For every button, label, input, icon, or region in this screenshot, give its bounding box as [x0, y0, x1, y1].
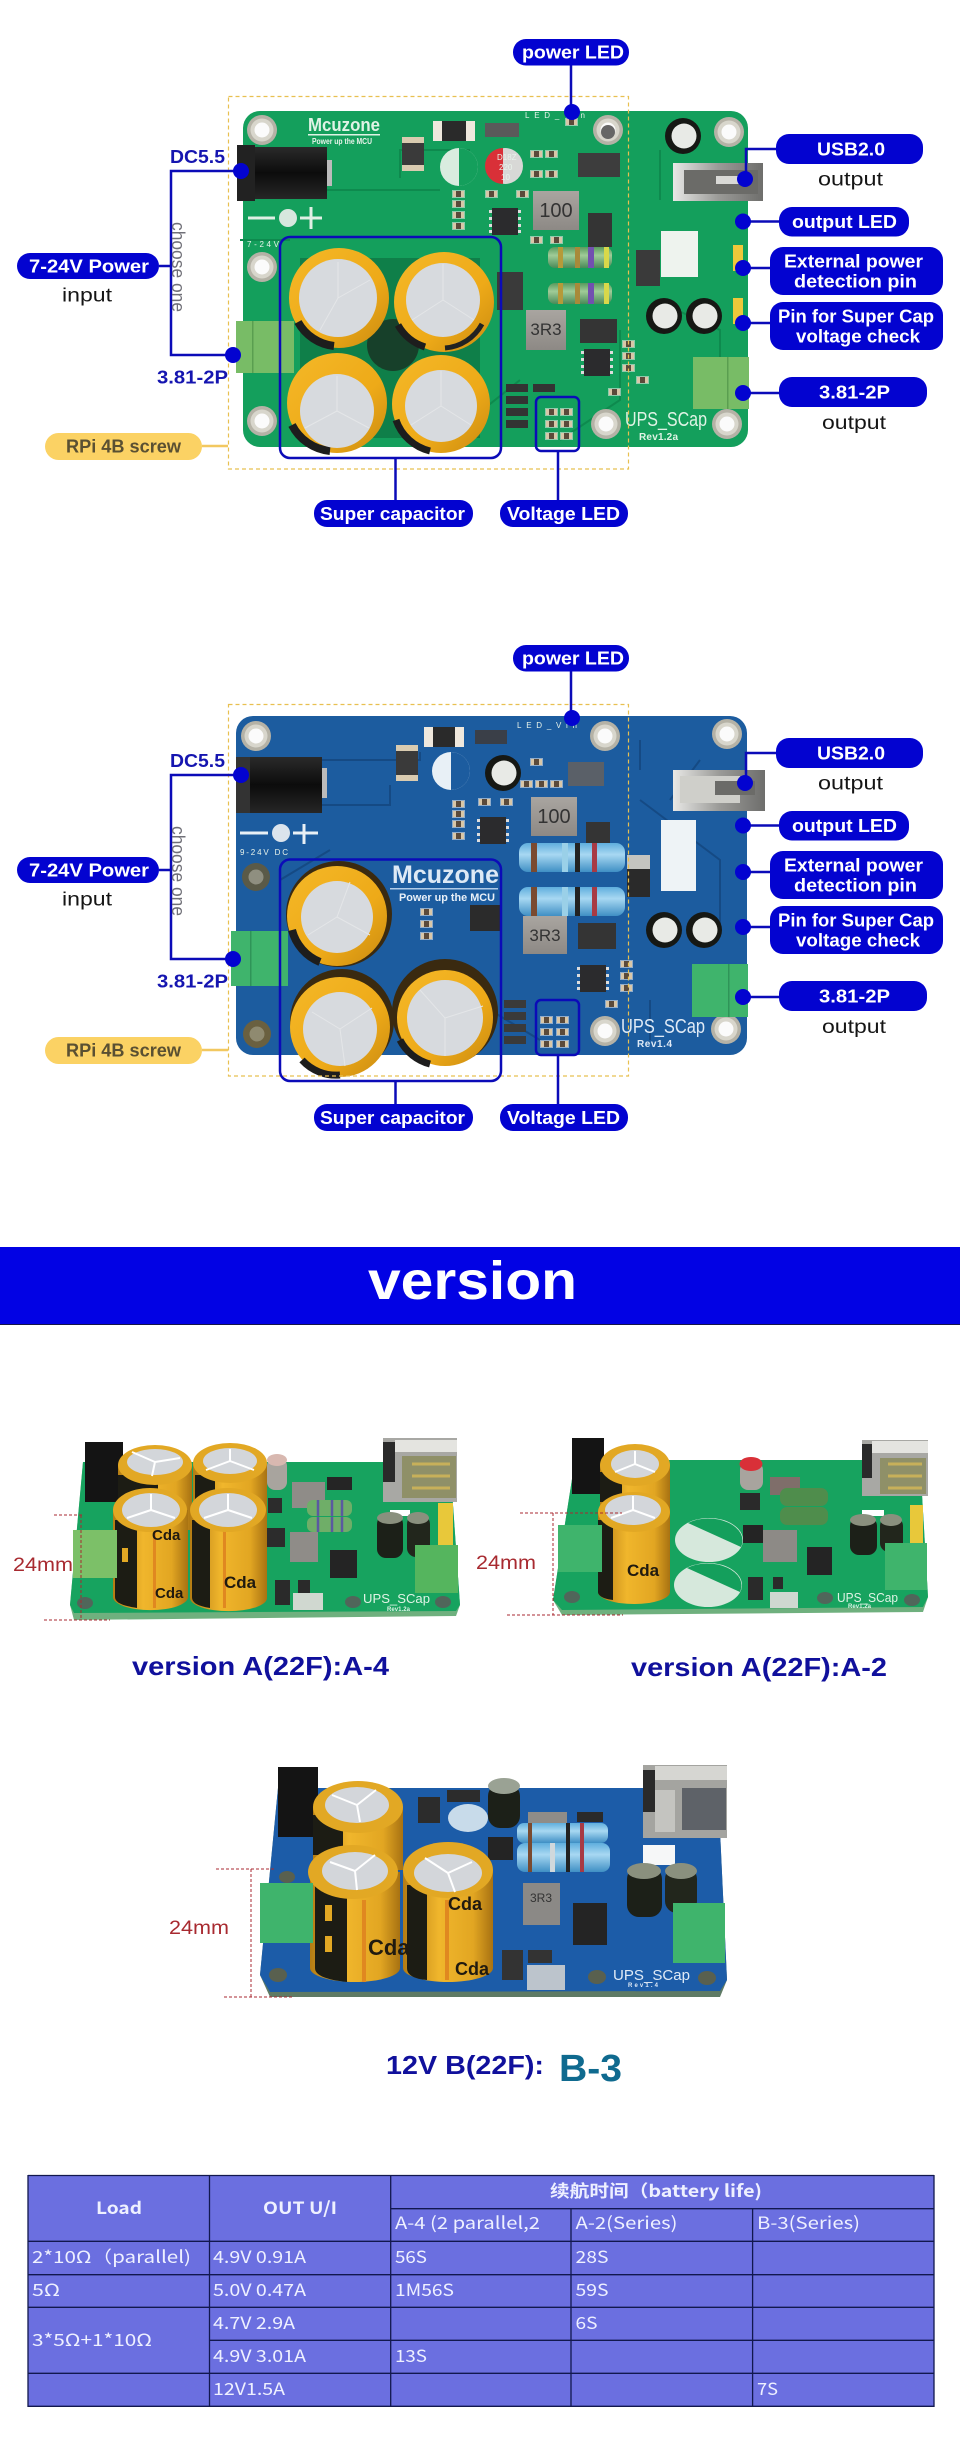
label: pin for super cap voltage check — [770, 906, 943, 954]
connector: output terminal — [693, 357, 749, 409]
PCB: blue B board: Rev1.4 — [637, 1039, 672, 1050]
label: choose one: choose one — [168, 222, 188, 312]
PCB: green A board: 7-24V — [247, 240, 280, 249]
capacitors: B-3 three: Cda — [368, 1935, 410, 1960]
label: pin for super cap voltage check: voltage check — [796, 326, 921, 346]
label: 3.81-2P input: 3.81-2P — [157, 368, 228, 388]
table header: OUT U/I — [263, 2194, 337, 2219]
label: DC5.5: DC5.5 — [170, 147, 225, 167]
table rows: 28S — [576, 2243, 608, 2268]
label: USB2.0 output — [776, 738, 923, 794]
resistors: blue — [519, 843, 625, 916]
label: output LED — [779, 811, 909, 840]
leader line: RPi — [202, 445, 228, 447]
heading banner: version: version — [368, 1251, 577, 1311]
table header: A-4 (2 parallel,2 — [395, 2209, 540, 2234]
table header — [96, 2177, 860, 2234]
table rows: 5Ω — [32, 2276, 60, 2301]
frame: RPi 4B outline — [228, 96, 628, 469]
capacitors: A-2 pair: Cda — [627, 1561, 660, 1580]
PCB: green A board: Power up the MCU — [312, 137, 372, 146]
inductor: 100: 100 — [537, 806, 571, 828]
label: 7-24V Power input: 7-24V Power — [29, 860, 149, 880]
label: DC5.5: DC5.5 — [170, 751, 225, 771]
capacitors: front pair: Cda — [152, 1527, 181, 1544]
table rows: 13S — [395, 2342, 427, 2367]
table rows: 4.7V 2.9A — [213, 2309, 296, 2334]
connector: DC jack — [237, 145, 332, 201]
table rows: 3*5Ω+1*10Ω — [32, 2326, 152, 2351]
logo: Mcuzone: Power up the MCU — [399, 892, 495, 904]
table rows: 5.0V 0.47A — [213, 2276, 307, 2301]
dimension: A-2 24mm — [476, 1513, 623, 1615]
heading banner: version — [0, 1247, 960, 1325]
label: 7-24V Power input: input — [62, 890, 113, 910]
connector: DC jack — [236, 757, 327, 813]
label: external power detection pin: detection pin — [794, 272, 917, 292]
label: super capacitor — [314, 500, 473, 527]
label: 3.81-2P output: output — [822, 413, 887, 434]
table rows: 4.9V 0.91A — [213, 2243, 307, 2268]
label: 3.81-2P input: 3.81-2P — [157, 972, 228, 992]
label: power LED — [513, 39, 629, 66]
highlight: voltage LED box — [536, 1000, 579, 1055]
label: power LED: power LED — [522, 648, 624, 668]
leader lines — [159, 671, 779, 1104]
caption: 12V B(22F) B-3: 12V B(22F): — [386, 2050, 544, 2080]
dimension: B-3 24mm — [169, 1869, 292, 1997]
capacitors: B-3 three: Cda — [448, 1894, 483, 1914]
label: external power detection pin — [770, 247, 943, 295]
label: USB2.0 output — [776, 134, 923, 190]
label: output LED — [779, 207, 909, 236]
highlight: super capacitor box — [280, 860, 501, 1081]
PCB: green A board: 10 — [501, 173, 510, 182]
photo: version B-3: 3R3 — [530, 1891, 552, 1905]
label: 3.81-2P output: 3.81-2P — [819, 382, 890, 402]
caption: 12V B(22F) B-3: B-3 — [559, 2048, 622, 2090]
label: USB2.0 output: USB2.0 — [817, 744, 885, 764]
label: voltage LED: Voltage LED — [507, 1108, 620, 1128]
capacitors: A-2 pair — [598, 1444, 670, 1604]
label: voltage LED: Voltage LED — [507, 504, 620, 524]
label: RPi 4B screw — [45, 1037, 202, 1064]
label: output LED: output LED — [792, 212, 897, 232]
PCB: green A board: LED_Vin — [525, 111, 585, 120]
connector: input terminal — [231, 931, 288, 986]
panel: blue board diagram — [17, 645, 943, 1131]
photo: version A-4: Rev1.2a — [387, 1607, 411, 1613]
label: power LED: power LED — [522, 42, 624, 62]
capacitors: three top view — [286, 861, 498, 1077]
PCB: blue B board — [236, 716, 747, 1055]
caption: version A-4: version A(22F):A-4 — [132, 1651, 390, 1681]
label: 3.81-2P output: output — [822, 1017, 887, 1038]
label: output LED: output LED — [792, 816, 897, 836]
label: pin for super cap voltage check: Pin for Super Cap — [778, 306, 934, 326]
label: pin for super cap voltage check — [770, 302, 943, 350]
inductor: 3R3 — [526, 310, 566, 350]
dimension: A-4 24mm — [13, 1515, 110, 1620]
label: choose one: choose one — [168, 826, 188, 916]
anchor dots — [225, 104, 753, 401]
label: 7-24V Power input — [17, 253, 159, 306]
label: 3.81-2P output — [779, 981, 927, 1038]
capacitors: front pair — [113, 1488, 267, 1611]
label: super capacitor: Super capacitor — [320, 1108, 465, 1128]
inductor: 3R3 — [523, 916, 567, 954]
inductor: 100 — [533, 191, 579, 230]
anchor dots — [225, 710, 753, 1005]
panel: green board diagram — [17, 39, 943, 527]
table header: A-2(Series) — [576, 2209, 678, 2234]
label: external power detection pin: detection pin — [794, 876, 917, 896]
table: battery life — [28, 2175, 934, 2407]
capacitors: front pair: Cda — [155, 1585, 184, 1602]
table header: B-3(Series) — [757, 2209, 860, 2234]
highlight: super capacitor box — [280, 237, 501, 458]
photo: version A-4 — [70, 1438, 460, 1620]
table rows: 2*10Ω（parallel) — [32, 2243, 191, 2268]
frame: RPi 4B outline — [228, 704, 628, 1076]
connector: input terminal — [236, 321, 294, 373]
leader lines — [159, 65, 779, 500]
label: voltage LED — [500, 1104, 628, 1131]
photo: version A-4: UPS_SCap — [363, 1591, 430, 1606]
photo: version B-3: Rev1.4 — [628, 1983, 659, 1989]
table rows: 4.9V 3.01A — [213, 2342, 307, 2367]
highlight: voltage LED box — [536, 397, 579, 451]
label: 7-24V Power input: 7-24V Power — [29, 256, 149, 276]
label: RPi 4B screw — [45, 433, 202, 460]
label: power LED — [513, 645, 629, 672]
resistors: green — [548, 247, 612, 304]
label: pin for super cap voltage check: voltage check — [796, 930, 921, 950]
connector: USB — [673, 770, 765, 811]
table header: 续航时间（battery life) — [550, 2177, 762, 2202]
photo: version A-2: Rev1.2a — [848, 1604, 872, 1610]
inductor: 100: 100 — [539, 200, 573, 222]
label: pin for super cap voltage check: Pin for Super Cap — [778, 910, 934, 930]
table rows: 56S — [395, 2243, 427, 2268]
label: USB2.0 output: output — [818, 170, 884, 190]
label: external power detection pin — [770, 851, 943, 899]
label: external power detection pin: External power — [784, 252, 923, 272]
label: external power detection pin: External power — [784, 856, 923, 876]
PCB: green A board: D18Z — [497, 153, 517, 162]
label: voltage LED — [500, 500, 628, 527]
table rows — [32, 2243, 778, 2400]
PCB: green A board — [240, 111, 760, 447]
table header: Load — [96, 2194, 142, 2219]
label: USB2.0 output: USB2.0 — [817, 140, 885, 160]
photo: version A-2 — [553, 1438, 928, 1615]
table rows: 7S — [757, 2375, 778, 2400]
table rows: 12V1.5A — [213, 2375, 286, 2400]
label: RPi 4B screw: RPi 4B screw — [66, 436, 182, 456]
inductor: 100 — [531, 797, 577, 836]
connector: output terminal — [692, 964, 748, 1017]
label: 7-24V Power input: input — [62, 286, 113, 306]
label: 7-24V Power input — [17, 857, 159, 910]
table rows: 59S — [576, 2276, 608, 2301]
table rows: 1M56S — [395, 2276, 454, 2301]
capacitors: B-3 three: Cda — [455, 1959, 490, 1979]
logo: Mcuzone — [390, 861, 499, 904]
logo: Mcuzone: Mcuzone — [392, 861, 499, 889]
PCB: blue B board: LED_Vin — [517, 721, 577, 730]
label: super capacitor — [314, 1104, 473, 1131]
capacitors: rear pair — [118, 1443, 267, 1530]
label: 3.81-2P output: 3.81-2P — [819, 986, 890, 1006]
caption: 12V B(22F) B-3 — [386, 2048, 622, 2090]
PCB: green A board: 220 — [499, 163, 513, 172]
dimension: A-2 24mm: 24mm — [476, 1553, 536, 1574]
photo: version B-3: UPS_SCap — [613, 1967, 690, 1984]
inductor: 3R3: 3R3 — [530, 320, 562, 339]
label: 3.81-2P output — [779, 377, 927, 434]
label: USB2.0 output: output — [818, 774, 884, 794]
board label: UPS_SCap: UPS_SCap — [625, 409, 707, 431]
dimension: B-3 24mm: 24mm — [169, 1918, 229, 1939]
logo: Mcuzone: Mcuzone — [308, 115, 380, 135]
inductor: 3R3: 3R3 — [529, 926, 561, 945]
capacitors: four top view — [287, 248, 494, 453]
PCB: blue B board: 9-24V DC — [240, 848, 288, 857]
table rows: 6S — [576, 2309, 598, 2334]
leader line: RPi — [202, 1049, 228, 1051]
caption: version A-2: version A(22F):A-2 — [631, 1652, 887, 1682]
connector: USB — [673, 163, 763, 201]
PCB: green A board: Rev1.2a — [639, 432, 678, 443]
label: super capacitor: Super capacitor — [320, 504, 465, 524]
capacitors: front pair: Cda — [224, 1573, 257, 1592]
board label: UPS_SCap: UPS_SCap — [621, 1016, 705, 1038]
capacitors: B-3 three — [308, 1781, 493, 1982]
photo: version B-3 — [260, 1765, 727, 1997]
photo: version A-2: UPS_SCap — [837, 1590, 898, 1605]
label: RPi 4B screw: RPi 4B screw — [66, 1040, 182, 1060]
dimension: A-4 24mm: 24mm — [13, 1555, 73, 1576]
